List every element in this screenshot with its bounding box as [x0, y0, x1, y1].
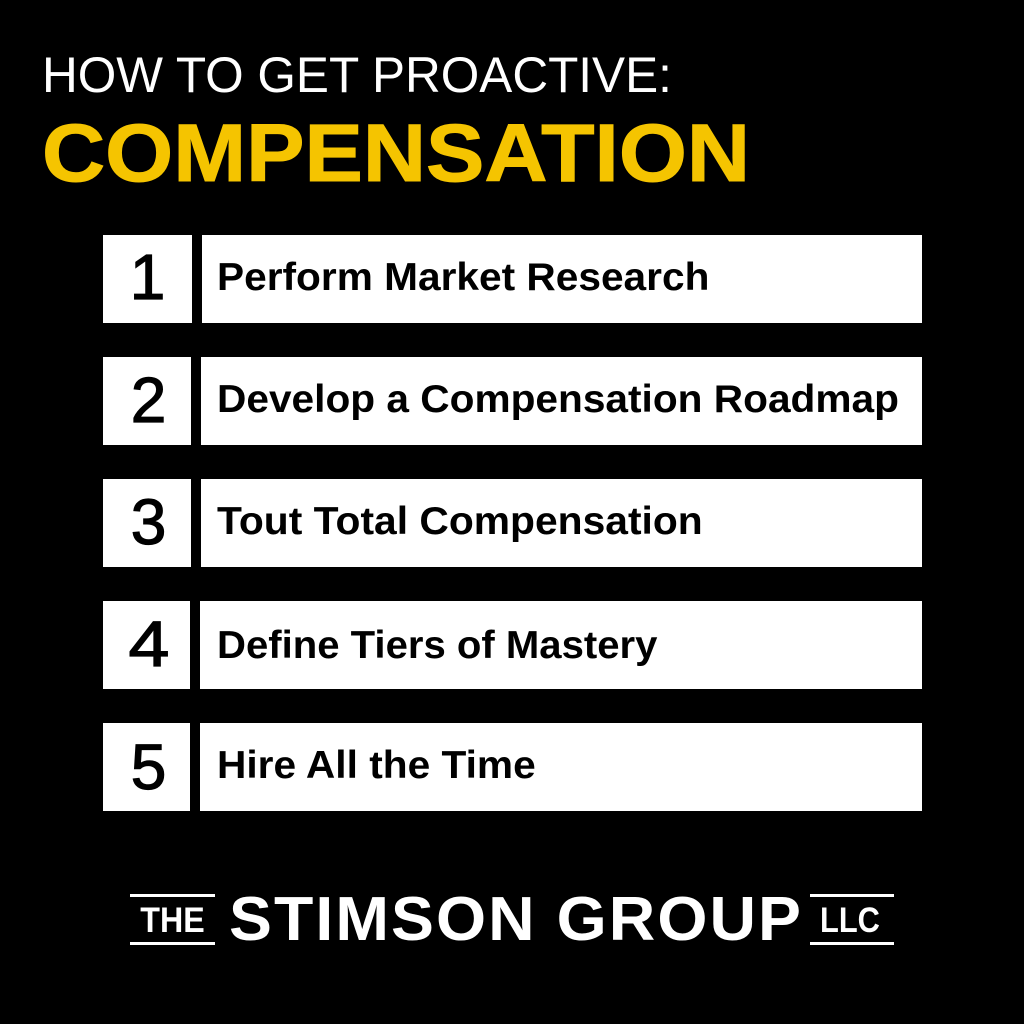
step 4 label: Define Tiers of Mastery	[217, 624, 657, 667]
step 1 number box	[103, 235, 192, 323]
logo: THE block: THE	[140, 901, 205, 940]
step 3 label box	[201, 479, 922, 567]
step 4 number box: 4	[129, 608, 169, 680]
step 5 number box: 5	[131, 731, 166, 803]
step 5 number box	[103, 723, 190, 811]
logo: STIMSON GROUP wordmark: STIMSON GROUP	[229, 885, 803, 954]
step 3 label: Tout Total Compensation	[217, 500, 703, 543]
logo: LLC block	[810, 894, 894, 945]
list of five steps	[103, 235, 922, 811]
title: compensation: COMPENSATION	[42, 108, 750, 199]
heading: how to get proactive: HOW TO GET PROACTIVE:	[42, 47, 672, 103]
step 4 number box	[103, 601, 190, 689]
step 4 label box	[200, 601, 922, 689]
logo: THE block	[130, 894, 215, 945]
step 2 label: Develop a Compensation Roadmap	[217, 378, 899, 421]
step 2 number box: 2	[131, 364, 166, 436]
logo: the stimson group llc	[130, 885, 894, 954]
step 5 label box	[200, 723, 922, 811]
step 3 number box: 3	[131, 486, 166, 558]
step 1 label box	[202, 235, 922, 323]
logo: LLC block: LLC	[820, 901, 880, 940]
step 2 label box	[201, 357, 922, 445]
step 1 label: Perform Market Research	[217, 256, 709, 299]
step 5 label: Hire All the Time	[217, 744, 536, 787]
step 2 number box	[103, 357, 191, 445]
step 3 number box	[103, 479, 191, 567]
step 1 number box: 1	[130, 241, 165, 313]
